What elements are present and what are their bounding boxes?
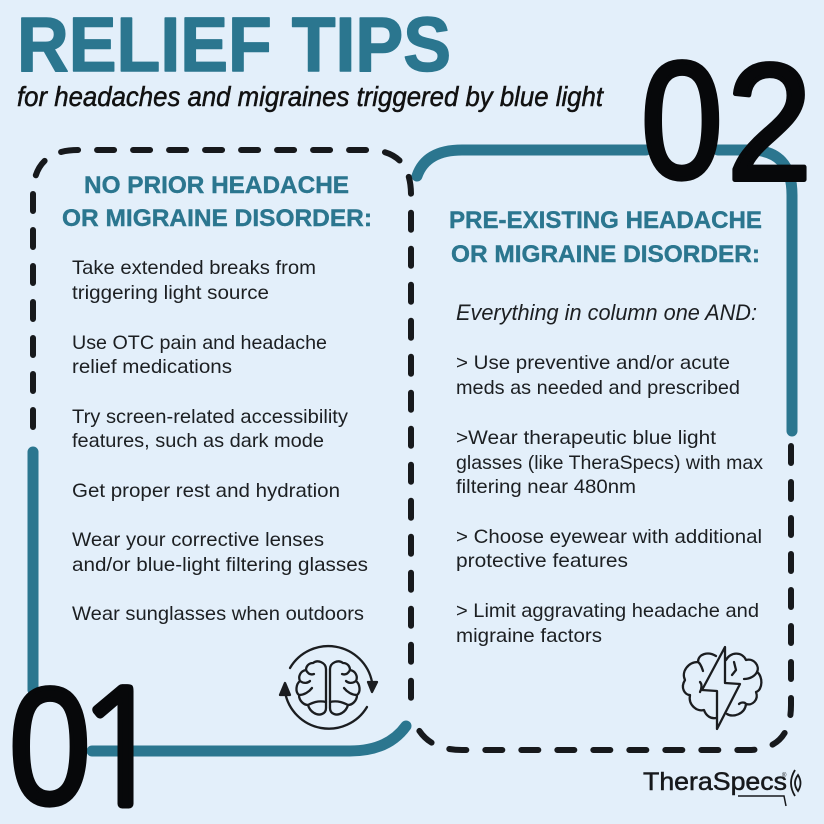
dashed frame: column one [33, 150, 411, 705]
number 01 [9, 654, 169, 824]
tip: protective eyewear [456, 526, 762, 572]
number 02: 0 [641, 28, 723, 214]
logo: TheraSpecs: ® [782, 772, 787, 779]
subtitle: for headaches and migraines triggered by blue light [17, 81, 604, 112]
tip: protective eyewear: > Choose eyewear with additional [456, 526, 762, 548]
tip: therapeutic glasses: filtering near 480nm [456, 476, 636, 498]
dashed frame: column two [416, 446, 791, 750]
tip: sunglasses: Wear sunglasses when outdoors [72, 603, 364, 625]
number 02: 2 [727, 30, 812, 215]
panel: column one [62, 172, 377, 729]
tip: protective eyewear: protective features [456, 550, 628, 572]
tip: rest and hydration: Get proper rest and hydration [72, 480, 340, 502]
tip: preventive meds [456, 352, 740, 399]
tip: aggravating factors: migraine factors [456, 625, 602, 647]
heading: no prior disorder: NO PRIOR HEADACHE [84, 172, 349, 199]
heading: no prior disorder: OR MIGRAINE DISORDER: [62, 205, 372, 232]
panel: column two [449, 207, 763, 729]
tip: OTC medications: Use OTC pain and headache [72, 332, 327, 354]
number 02 [641, 28, 812, 215]
heading: pre-existing disorder: PRE-EXISTING HEADACHE [449, 207, 762, 234]
tip: extended breaks: Take extended breaks from [72, 257, 316, 279]
tip: extended breaks [72, 257, 316, 304]
tip: aggravating factors: > Limit aggravating headache and [456, 600, 759, 622]
tip: accessibility features: Try screen-related accessibility [72, 406, 348, 428]
tip: accessibility features [72, 406, 348, 452]
teal frame: column two [417, 150, 792, 431]
tip: corrective lenses [72, 529, 368, 576]
logo: TheraSpecs: TheraSpecs [643, 768, 787, 796]
heading: pre-existing disorder: OR MIGRAINE DISORDER: [451, 241, 760, 268]
title: RELIEF TIPS [17, 2, 451, 88]
heading: no prior disorder [62, 172, 372, 232]
intro line: Everything in column one AND: [456, 300, 757, 325]
tip: therapeutic glasses: glasses (like TheraSpecs) with max [456, 452, 763, 474]
tip: corrective lenses: Wear your corrective lenses [72, 529, 324, 551]
tip: preventive meds: > Use preventive and/or acute [456, 352, 730, 374]
icon: brain with lightning bolt [683, 647, 761, 729]
icon: brain with cycle arrows [280, 646, 377, 729]
tip: accessibility features: features, such as dark mode [72, 430, 324, 452]
logo: TheraSpecs [643, 768, 800, 806]
tip: preventive meds: meds as needed and prescribed [456, 377, 740, 399]
tip: OTC medications: relief medications [72, 356, 232, 378]
tip: therapeutic glasses: >Wear therapeutic blue light [456, 427, 717, 449]
heading: pre-existing disorder [449, 207, 762, 268]
tip: extended breaks: triggering light source [72, 282, 269, 304]
teal frame: column one [33, 452, 406, 751]
tip: aggravating factors [456, 600, 759, 647]
tip: therapeutic glasses [456, 427, 763, 498]
tip: OTC medications [72, 332, 327, 378]
tip: corrective lenses: and/or blue-light filtering glasses [72, 554, 368, 576]
